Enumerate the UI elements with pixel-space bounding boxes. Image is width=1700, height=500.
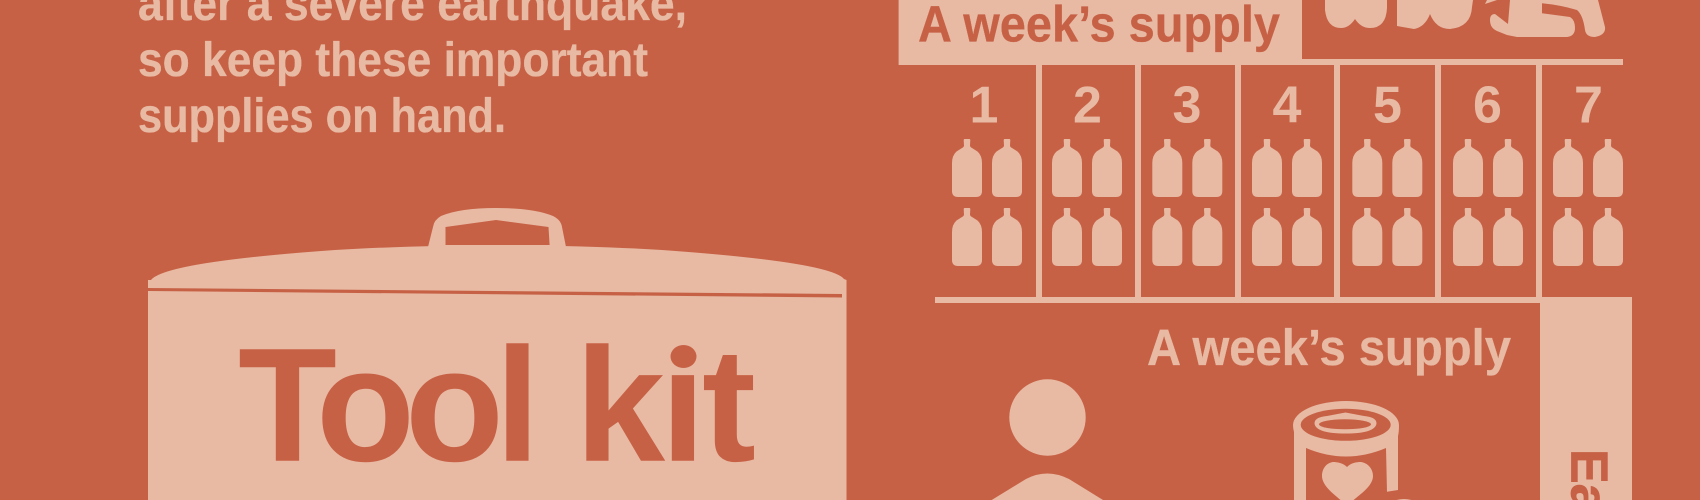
intro text block: so keep these important bbox=[138, 34, 648, 87]
food heading: A week’s supply bbox=[1147, 319, 1512, 376]
shelf dividers and bottom shelf bbox=[935, 65, 1542, 303]
toolbox handle bbox=[428, 208, 566, 247]
icon: person bbox=[992, 379, 1103, 500]
icon: food can with heart bbox=[1293, 401, 1422, 500]
panel: water banner bbox=[899, 0, 1623, 65]
day 5 water bbox=[1352, 77, 1422, 266]
intro text block bbox=[138, 0, 687, 143]
icon: cropped supplies top right bbox=[1325, 0, 1605, 37]
day 5 water: 5 bbox=[1373, 77, 1402, 135]
day 6 water: 6 bbox=[1473, 77, 1502, 135]
day 2 water: 2 bbox=[1073, 77, 1102, 135]
lid seam bbox=[148, 288, 842, 298]
day 2 water bbox=[1052, 77, 1122, 266]
day 6 water bbox=[1453, 77, 1523, 266]
day 1 water bbox=[952, 77, 1022, 266]
banner box bbox=[899, 0, 1623, 65]
tool kit label: Tool kit bbox=[238, 315, 756, 496]
day 3 water bbox=[1152, 77, 1222, 266]
icon: tool kit box bbox=[148, 208, 846, 500]
day 4 water bbox=[1252, 77, 1322, 266]
round dot on the i bbox=[665, 338, 701, 371]
intro text block: supplies on hand. bbox=[138, 90, 506, 143]
toolbox lid and body bbox=[148, 245, 846, 500]
side panel: rotated label bbox=[1540, 297, 1632, 500]
day 4 water: 4 bbox=[1273, 77, 1302, 135]
day 1 water: 1 bbox=[970, 77, 998, 135]
day 7 water: 7 bbox=[1574, 77, 1603, 135]
day 7 water bbox=[1553, 77, 1623, 266]
day 3 water: 3 bbox=[1173, 77, 1201, 135]
